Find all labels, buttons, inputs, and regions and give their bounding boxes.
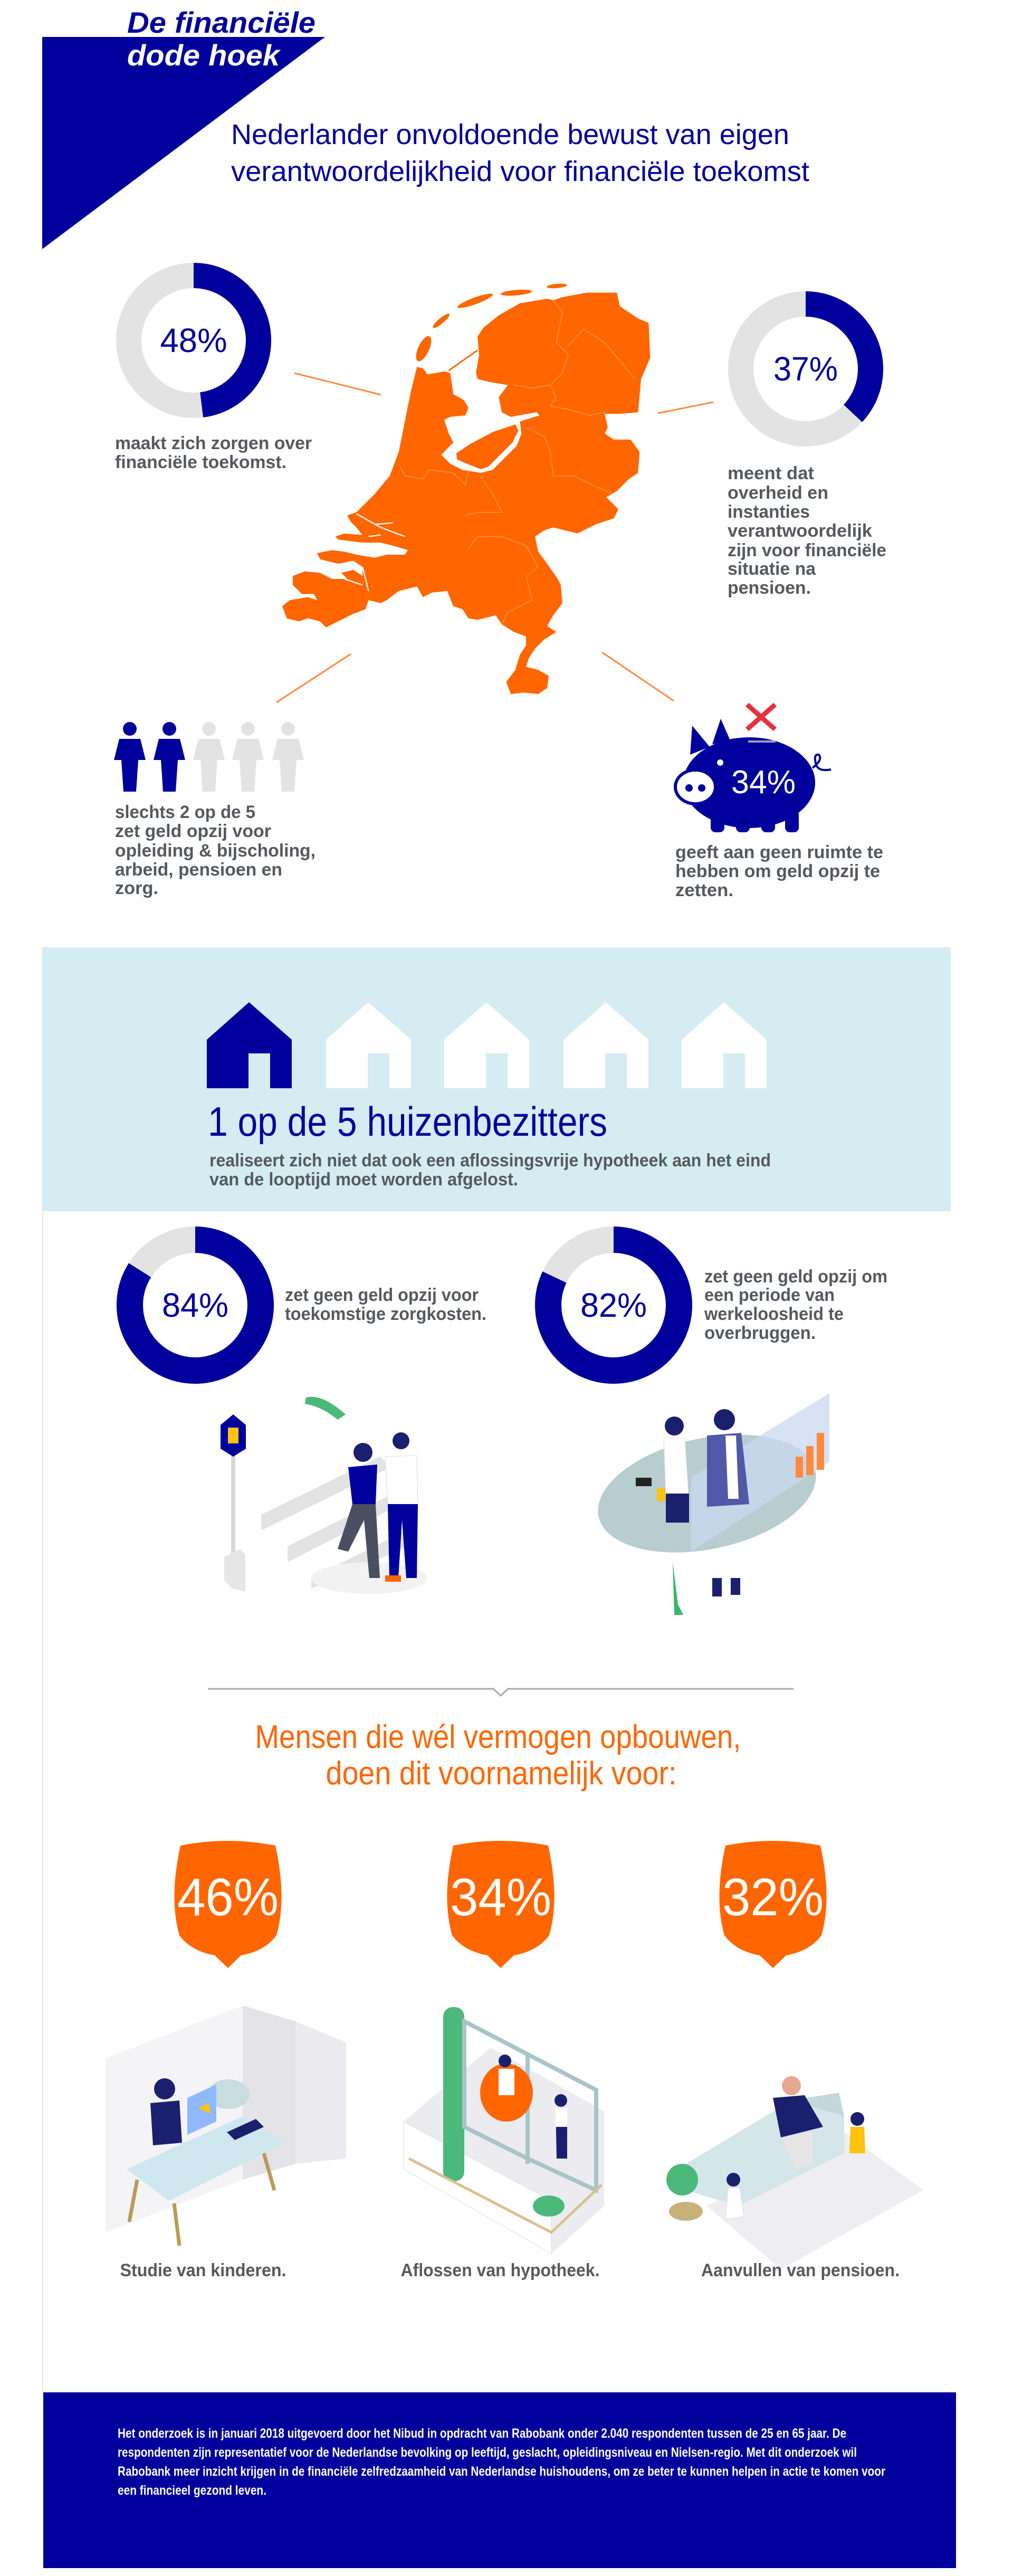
heading	[231, 119, 809, 187]
ring 82%: 82%	[580, 1286, 647, 1324]
captions: Aflossen van hypotheek.	[401, 2260, 599, 2280]
title: De financiële	[127, 6, 316, 39]
header triangle	[42, 37, 325, 249]
ring 48%: 48%	[160, 321, 227, 359]
text: 37%: verantwoordelijk	[728, 521, 872, 541]
illustration: sofa	[666, 2076, 923, 2269]
heading: 1 op de 5: 1 op de 5 huizenbezitters	[208, 1098, 607, 1145]
title	[127, 6, 316, 72]
footer text: respondenten zijn representatief voor de Nederlandse bevolking op leeftijd, geslacht, opleidingsniveau en Nielsen-regio. Met dit onderzoek wil	[118, 2445, 857, 2460]
illustration: balcony	[404, 2007, 604, 2254]
text: 2 op de 5: zorg.	[115, 878, 158, 898]
ring 37%: 37%	[773, 350, 838, 388]
subtitle: realiseert zich niet dat ook een aflossingsvrije hypotheek aan het eind	[209, 1151, 771, 1171]
text: 2 op de 5: zet geld opzij voor	[115, 821, 271, 841]
text: 84%	[285, 1285, 486, 1324]
bubble 46%	[174, 1841, 282, 1968]
text: 84%: toekomstige zorgkosten.	[285, 1304, 486, 1324]
ring 37%	[741, 304, 871, 434]
captions: Aanvullen van pensioen.	[701, 2260, 900, 2280]
text: 82%: zet geen geld opzij om	[704, 1267, 887, 1287]
text: 37%	[728, 463, 886, 598]
bubble 34%: 34%	[450, 1868, 551, 1927]
text: 37%: instanties	[728, 502, 810, 522]
text: 84%: zet geen geld opzij voor	[285, 1285, 479, 1305]
title: dode hoek	[127, 39, 281, 72]
subtitle: van de looptijd moet worden afgelost.	[209, 1170, 518, 1190]
text: pig: zetten.	[675, 880, 733, 900]
footer panel	[43, 2392, 956, 2568]
footer text	[118, 2426, 885, 2498]
heading: Nederlander onvoldoende bewust van eigen	[231, 119, 789, 150]
captions	[120, 2260, 900, 2280]
text: 48%: financiële toekomst.	[115, 452, 286, 472]
illustration: stairs and couple	[221, 1397, 427, 1594]
text: 37%: situatie na	[728, 559, 816, 579]
icon: piggy bank 34%	[675, 705, 831, 832]
text: 2 op de 5: slechts 2 op de 5	[115, 802, 255, 822]
illustration: study	[106, 2005, 346, 2246]
illustration: office meeting	[587, 1393, 829, 1615]
text: 82%: een periode van	[704, 1285, 835, 1305]
text: 2 op de 5: opleiding & bijscholing,	[115, 841, 316, 861]
heading: vermogen: doen dit voornamelijk voor:	[326, 1755, 676, 1792]
panel: houses	[42, 947, 951, 1211]
text: 82%	[704, 1267, 887, 1343]
connector lines	[276, 373, 713, 702]
text: 82%: werkeloosheid te	[704, 1304, 844, 1324]
text: 37%: meent dat	[728, 463, 814, 483]
bubble 34%	[447, 1841, 555, 1968]
heading: verantwoordelijkheid voor financiële toekomst	[231, 156, 809, 187]
text: 48%: maakt zich zorgen over	[115, 433, 312, 453]
text: 37%: zijn voor financiële	[728, 540, 886, 560]
bubble 32%	[719, 1841, 827, 1968]
text: 37%: overheid en	[728, 483, 828, 503]
ring 84%	[130, 1240, 261, 1371]
map: Netherlands	[282, 283, 650, 694]
text: 48%	[115, 433, 312, 472]
text: pig: hebben om geld opzij te	[675, 861, 880, 881]
ring 48%	[129, 275, 259, 405]
text: 2 op de 5: arbeid, pensioen en	[115, 860, 282, 880]
text: pig: geeft aan geen ruimte te	[675, 842, 883, 862]
text: 82%: overbruggen.	[704, 1323, 816, 1343]
text: 2 op de 5	[115, 802, 316, 898]
heading: vermogen	[255, 1719, 741, 1792]
ring 82%	[548, 1240, 679, 1371]
text: 37%: pensioen.	[728, 578, 811, 598]
icon: houses	[207, 1002, 767, 1088]
divider	[208, 1689, 794, 1696]
icon: 5 people	[114, 722, 304, 792]
captions: Studie van kinderen.	[120, 2260, 286, 2280]
bubble 32%: 32%	[722, 1868, 824, 1927]
text: pig	[675, 842, 883, 900]
icon: piggy bank 34%: 34%	[731, 764, 796, 801]
bubble 46%: 46%	[177, 1868, 279, 1927]
ring 84%: 84%	[162, 1286, 228, 1324]
heading: vermogen: Mensen die wél vermogen opbouwen,	[255, 1719, 741, 1755]
footer text: Het onderzoek is in januari 2018 uitgevoerd door het Nibud in opdracht van Rabobank onder 2.040 respondenten tussen de 25 en 65 jaar. De	[118, 2426, 846, 2441]
subtitle	[209, 1151, 771, 1190]
footer text: een financieel gezond leven.	[118, 2483, 266, 2498]
